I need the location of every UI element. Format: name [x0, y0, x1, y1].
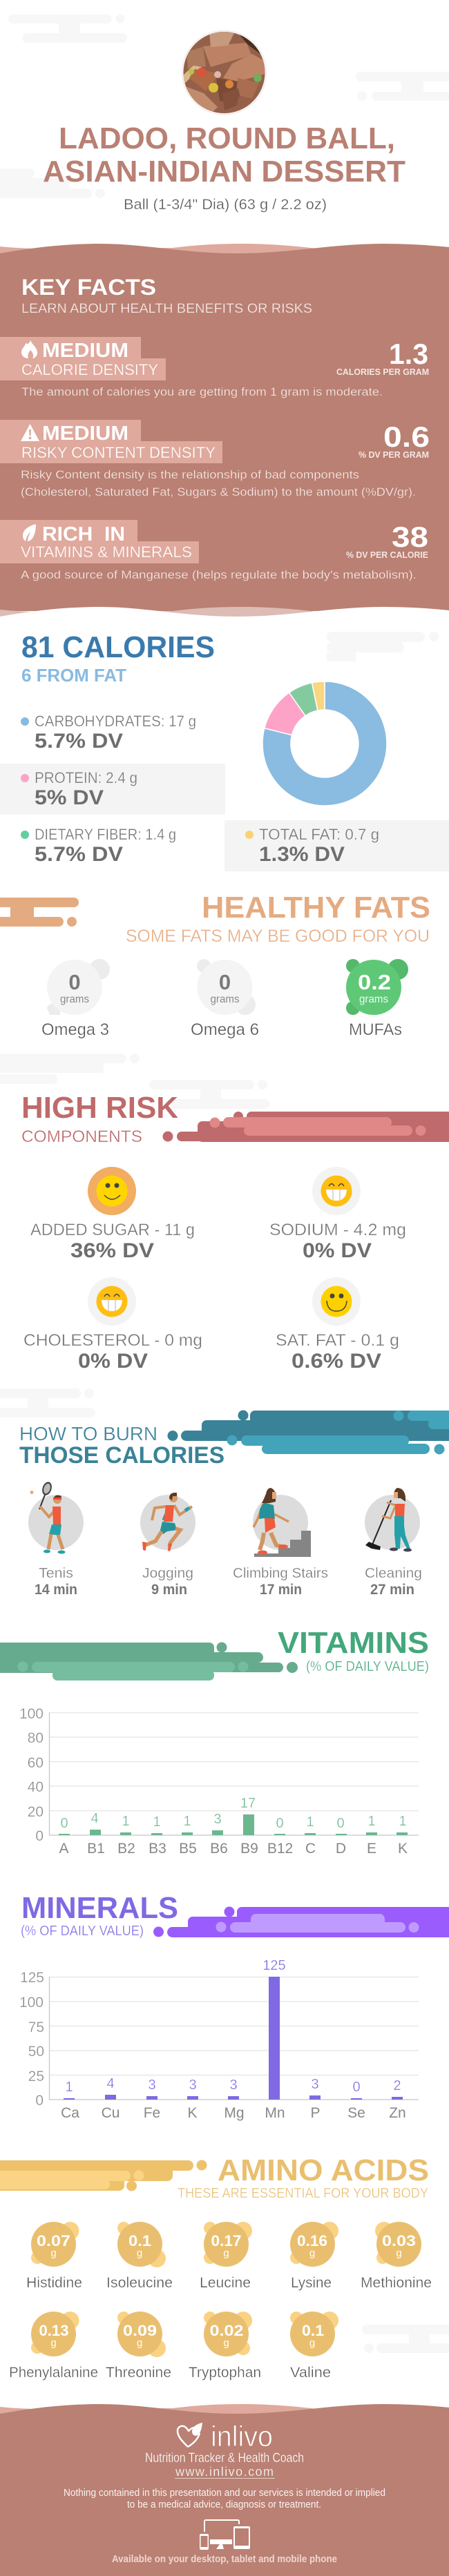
bar chart: vitamins: B9: [240, 1841, 258, 1857]
stat: omega 6: 0: [219, 970, 231, 994]
amino: valine: Valine: [290, 2365, 331, 2381]
heading: high risk: COMPONENTS: [21, 1127, 142, 1146]
stat: mufas: [346, 959, 408, 1039]
fact: risky content density: [0, 420, 430, 498]
heading: high risk: [21, 1091, 178, 1146]
icon: grin: [321, 1175, 352, 1207]
bar chart: vitamins: 20: [28, 1804, 44, 1820]
bar chart: minerals: 125: [20, 1970, 44, 1986]
availability note: Available on your desktop, tablet and mobile phone: [112, 2553, 337, 2565]
amino: methionine: Methionine: [361, 2275, 432, 2291]
bar chart: vitamins: B5: [179, 1841, 197, 1857]
bar chart: vitamins: 100: [19, 1706, 44, 1722]
amino: methionine: [361, 2222, 432, 2291]
title: ASIAN-INDIAN DESSERT: [43, 155, 405, 188]
bar chart: minerals: 3: [148, 2078, 156, 2093]
icon: cleaner with broom: [365, 1488, 412, 1552]
panel: vitamins: [0, 1626, 429, 1857]
icon: devices: [200, 2519, 250, 2550]
icon: stair climber: [254, 1488, 311, 1557]
heading: amino acids: THESE ARE ESSENTIAL FOR YOUR BODY: [178, 2186, 428, 2201]
heading: vitamins: VITAMINS: [278, 1626, 429, 1660]
bar chart: vitamins: B2: [117, 1841, 135, 1857]
decoration: green bars: [0, 1642, 298, 1681]
fact: rich in vitamins: RICH IN: [42, 523, 125, 545]
stat: omega 3: Omega 3: [41, 1020, 109, 1039]
stat: sodium: SODIUM - 4.2 mg: [269, 1221, 406, 1239]
bar chart: minerals: 75: [28, 2020, 44, 2035]
heading: vitamins: (% OF DAILY VALUE): [306, 1659, 429, 1674]
tagline: Nutrition Tracker & Health Coach: [145, 2451, 304, 2466]
bar chart: minerals: 100: [19, 1995, 44, 2011]
amino: tryptophan: 0.02: [210, 2322, 243, 2339]
fact: rich in vitamins: % DV PER CALORIE: [346, 550, 428, 560]
decoration: purple bars: [153, 1907, 449, 1937]
icon: jogger: [142, 1493, 192, 1551]
heading: how to burn: THOSE CALORIES: [19, 1442, 224, 1469]
icon: tennis player: [30, 1480, 65, 1553]
fact: rich in vitamins: 38: [392, 521, 428, 553]
stat: added sugar: ADDED SUGAR - 11 g: [30, 1221, 195, 1239]
panel: healthy fats: [0, 891, 430, 1039]
bar chart: minerals: Mg: [224, 2105, 245, 2121]
stat: cholesterol: [23, 1277, 202, 1373]
activity: jogging: 9 min: [151, 1582, 187, 1598]
bar chart: vitamins: B6: [210, 1841, 228, 1857]
amino: phenylalanine: 0.13: [39, 2322, 69, 2339]
heading: how to burn: [19, 1423, 224, 1469]
donut chart: [262, 681, 387, 806]
amino: tryptophan: g: [223, 2337, 229, 2349]
amino: histidine: g: [50, 2247, 57, 2259]
amino: threonine: Threonine: [106, 2365, 171, 2381]
bar chart: minerals: Fe: [144, 2105, 160, 2121]
heading: how to burn: HOW TO BURN: [19, 1423, 157, 1444]
legend: dietary fiber: 5.7% DV: [35, 843, 123, 866]
bar chart: minerals: 0: [35, 2093, 44, 2109]
disclaimer: Nothing contained in this presentation and our services is intended or implied: [64, 2487, 385, 2499]
bar chart: minerals: P: [310, 2105, 321, 2121]
heading: high risk: HIGH RISK: [21, 1091, 178, 1125]
fact: risky content density: % DV PER GRAM: [359, 449, 429, 460]
legend: carbohydrates: 5.7% DV: [35, 730, 123, 753]
bar chart: vitamins: A: [59, 1841, 69, 1857]
amino: phenylalanine: [9, 2312, 98, 2381]
amino: lysine: [290, 2222, 338, 2291]
bar chart: vitamins: D: [336, 1841, 346, 1857]
amino: isoleucine: 0.1: [128, 2232, 151, 2249]
bar chart: minerals: Ca: [61, 2105, 79, 2121]
panel: high risk: [21, 1091, 449, 1373]
bar chart: minerals: 25: [28, 2069, 44, 2084]
icon: flame: [21, 340, 37, 358]
heading: healthy fats: SOME FATS MAY BE GOOD FOR YOU: [126, 927, 430, 946]
panel: key facts: [0, 244, 449, 621]
fact: risky content density: Risky Content density is the relationship of bad components: [21, 468, 359, 481]
amino: leucine: g: [223, 2247, 229, 2259]
legend: protein: 5% DV: [35, 786, 104, 809]
stat: cholesterol: 0% DV: [78, 1350, 148, 1373]
legend: total fat: 1.3% DV: [259, 843, 345, 866]
bar chart: vitamins: 0: [336, 1816, 345, 1831]
icon: warning triangle: [21, 424, 39, 441]
heading: key facts: LEARN ABOUT HEALTH BENEFITS OR RISKS: [21, 301, 312, 316]
disclaimer: [64, 2487, 385, 2510]
fact: risky content density: MEDIUM: [42, 423, 128, 445]
fact: calorie density: [0, 337, 429, 398]
fact: risky content density: (Cholesterol, Saturated Fat, Sugars & Sodium) to the amount (%DV/gr).: [21, 485, 416, 498]
disclaimer: to be a medical advice, diagnosis or treatment.: [127, 2499, 321, 2510]
stat: added sugar: [30, 1167, 195, 1262]
amino: histidine: Histidine: [26, 2275, 82, 2291]
legend: total fat: [245, 826, 379, 866]
amino: valine: g: [309, 2337, 315, 2349]
stat: omega 6: Omega 6: [191, 1020, 259, 1039]
bar chart: vitamins: 1: [153, 1814, 161, 1830]
bar chart: vitamins: 0: [276, 1816, 284, 1831]
stat: omega 3: [41, 959, 110, 1039]
fact: rich in vitamins: [0, 520, 428, 581]
stat: omega 6: grams: [210, 994, 239, 1005]
amino: lysine: Lysine: [291, 2275, 332, 2291]
stat: sat fat: [276, 1277, 399, 1373]
fact: calorie density: CALORIE DENSITY: [21, 361, 158, 378]
activity: tennis: 14 min: [35, 1582, 77, 1598]
icon: smiley: [97, 1175, 127, 1207]
stat: omega 3: 0: [68, 970, 81, 994]
legend: dietary fiber: [21, 826, 176, 866]
amino: methionine: g: [396, 2247, 402, 2259]
amino: leucine: 0.17: [211, 2232, 242, 2249]
panel: minerals: [19, 1891, 449, 2121]
stat: sat fat: 0.6% DV: [292, 1350, 381, 1373]
title: [43, 122, 405, 188]
amino: lysine: 0.16: [297, 2232, 327, 2249]
bar chart: vitamins: B1: [87, 1841, 105, 1857]
fact: calorie density: 1.3: [389, 338, 428, 370]
amino: valine: [290, 2312, 338, 2381]
bar chart: minerals: 3: [189, 2078, 197, 2093]
activity: jogging: Jogging: [142, 1566, 193, 1581]
bar chart: minerals: Se: [347, 2105, 365, 2121]
amino: histidine: 0.07: [37, 2232, 70, 2249]
bar chart: vitamins: 1: [122, 1814, 130, 1829]
bar chart: minerals: 125: [262, 1958, 286, 1973]
heading: calories: 81 CALORIES: [21, 630, 215, 664]
bar chart: vitamins: 4: [90, 1811, 99, 1826]
heading: minerals: (% OF DAILY VALUE): [21, 1924, 144, 1939]
stat: cholesterol: CHOLESTEROL - 0 mg: [23, 1331, 202, 1350]
bar chart: vitamins: 1: [306, 1814, 314, 1830]
activity: climbing stairs: [233, 1488, 328, 1598]
decoration: orange bars: [0, 898, 79, 927]
serving size: Ball (1-3/4" Dia) (63 g / 2.2 oz): [124, 197, 327, 213]
amino: methionine: 0.03: [382, 2232, 416, 2249]
legend: carbohydrates: CARBOHYDRATES: 17 g: [35, 713, 196, 730]
stat: sodium: [269, 1167, 406, 1262]
bar chart: minerals: 3: [311, 2077, 319, 2092]
bar chart: minerals: 4: [106, 2076, 115, 2091]
bar chart: vitamins: 3: [213, 1812, 222, 1827]
bar chart: vitamins: [19, 1706, 419, 1857]
stat: omega 6: [191, 959, 259, 1039]
decoration: yellow bars: [0, 2160, 207, 2191]
bar chart: minerals: Zn: [389, 2105, 406, 2121]
fact: calorie density: MEDIUM: [42, 340, 128, 362]
bar chart: vitamins: E: [367, 1841, 376, 1857]
amino: isoleucine: [106, 2222, 173, 2291]
food photo: [181, 30, 267, 117]
bar chart: minerals: 2: [393, 2078, 401, 2093]
stat: sat fat: SAT. FAT - 0.1 g: [276, 1331, 399, 1350]
bar chart: vitamins: 17: [240, 1796, 256, 1811]
amino: phenylalanine: Phenylalanine: [9, 2365, 98, 2381]
stat: mufas: grams: [359, 994, 388, 1005]
legend: protein: PROTEIN: 2.4 g: [35, 769, 137, 786]
heading: key facts: [21, 275, 312, 316]
heading: amino acids: AMINO ACIDS: [218, 2153, 429, 2187]
activity: tennis: Tenis: [39, 1566, 73, 1581]
amino: isoleucine: Isoleucine: [106, 2275, 173, 2291]
bar chart: vitamins: C: [305, 1841, 316, 1857]
bar chart: vitamins: 0: [60, 1816, 68, 1831]
stat: sodium: 0% DV: [303, 1239, 372, 1262]
bar chart: minerals: K: [187, 2105, 198, 2121]
panel: calories: [0, 630, 449, 871]
bar chart: minerals: 50: [28, 2044, 44, 2060]
stat: mufas: MUFAs: [349, 1020, 402, 1039]
bar chart: minerals: 3: [229, 2078, 238, 2093]
bar chart: vitamins: 0: [35, 1828, 44, 1844]
bar chart: vitamins: K: [398, 1841, 408, 1857]
fact: calorie density: The amount of calories you are getting from 1 gram is moderate.: [21, 385, 383, 398]
bar chart: minerals: [19, 1958, 419, 2121]
amino: phenylalanine: g: [50, 2337, 57, 2349]
fact: risky content density: RISKY CONTENT DENSITY: [21, 444, 216, 461]
heading: key facts: KEY FACTS: [21, 275, 156, 300]
amino: tryptophan: [189, 2312, 261, 2381]
amino: histidine: [26, 2222, 82, 2291]
heading: amino acids: [178, 2153, 429, 2201]
bar chart: minerals: 1: [65, 2080, 73, 2095]
panel: amino acids: [0, 2153, 432, 2381]
activity: cleaning: 27 min: [370, 1582, 414, 1598]
legend: carbohydrates: [21, 713, 196, 753]
bar chart: vitamins: B12: [267, 1841, 293, 1857]
heading: minerals: MINERALS: [21, 1891, 178, 1925]
icon: smile: [321, 1286, 352, 1317]
legend: protein: [21, 769, 137, 809]
fact: rich in vitamins: VITAMINS & MINERALS: [21, 543, 192, 561]
stat: added sugar: 36% DV: [70, 1239, 154, 1262]
bar chart: minerals: 0: [352, 2080, 361, 2095]
bar chart: vitamins: B3: [149, 1841, 166, 1857]
bar chart: vitamins: 1: [399, 1814, 407, 1829]
stat: omega 3: grams: [60, 994, 89, 1005]
heading: healthy fats: HEALTHY FATS: [202, 891, 430, 924]
icon: leaf: [23, 524, 36, 541]
panel: footer: [0, 2404, 449, 2576]
bar chart: vitamins: 1: [367, 1814, 376, 1829]
activity: cleaning: Cleaning: [365, 1566, 422, 1581]
bar chart: minerals: Cu: [102, 2105, 120, 2121]
activity: jogging: [140, 1493, 195, 1598]
decoration: teal bars: [167, 1410, 449, 1454]
logo: wordmark: inlivo: [211, 2420, 273, 2452]
panel: how to burn: [19, 1410, 449, 1598]
heading: calories: 6 FROM FAT: [21, 665, 126, 686]
bar chart: vitamins: 1: [183, 1814, 191, 1829]
amino: threonine: 0.09: [123, 2322, 157, 2339]
logo: heart: [178, 2423, 202, 2447]
bar chart: vitamins: 80: [28, 1730, 44, 1746]
bar chart: minerals: Mn: [265, 2105, 285, 2121]
bar chart: vitamins: 60: [28, 1755, 44, 1771]
amino: isoleucine: g: [137, 2247, 142, 2259]
amino: leucine: [200, 2222, 252, 2291]
fact: risky content density: 0.6: [383, 420, 430, 453]
amino: threonine: [106, 2312, 171, 2381]
amino: leucine: Leucine: [200, 2275, 251, 2291]
bar chart: vitamins: 40: [28, 1779, 44, 1795]
url: www.inlivo.com: [175, 2465, 274, 2479]
icon: grin: [97, 1286, 127, 1317]
activity: climbing stairs: Climbing Stairs: [233, 1566, 328, 1581]
stat: mufas: 0.2: [358, 970, 391, 994]
amino: lysine: g: [309, 2247, 315, 2259]
legend: dietary fiber: DIETARY FIBER: 1.4 g: [35, 826, 176, 843]
amino: tryptophan: Tryptophan: [189, 2365, 261, 2381]
heading: vitamins: [278, 1626, 429, 1674]
decoration: red bars: [163, 1112, 449, 1142]
activity: cleaning: [365, 1488, 422, 1598]
legend: total fat: TOTAL FAT: 0.7 g: [259, 826, 379, 843]
fact: rich in vitamins: A good source of Manganese (helps regulate the body's metabolism).: [21, 568, 417, 581]
fact: calorie density: CALORIES PER GRAM: [336, 367, 429, 377]
title: LADOO, ROUND BALL,: [59, 122, 395, 155]
heading: calories: [21, 630, 215, 686]
amino: threonine: g: [137, 2337, 142, 2349]
activity: tennis: [28, 1480, 84, 1598]
activity: climbing stairs: 17 min: [260, 1582, 302, 1598]
heading: healthy fats: [126, 891, 430, 946]
amino: valine: 0.1: [302, 2322, 324, 2339]
